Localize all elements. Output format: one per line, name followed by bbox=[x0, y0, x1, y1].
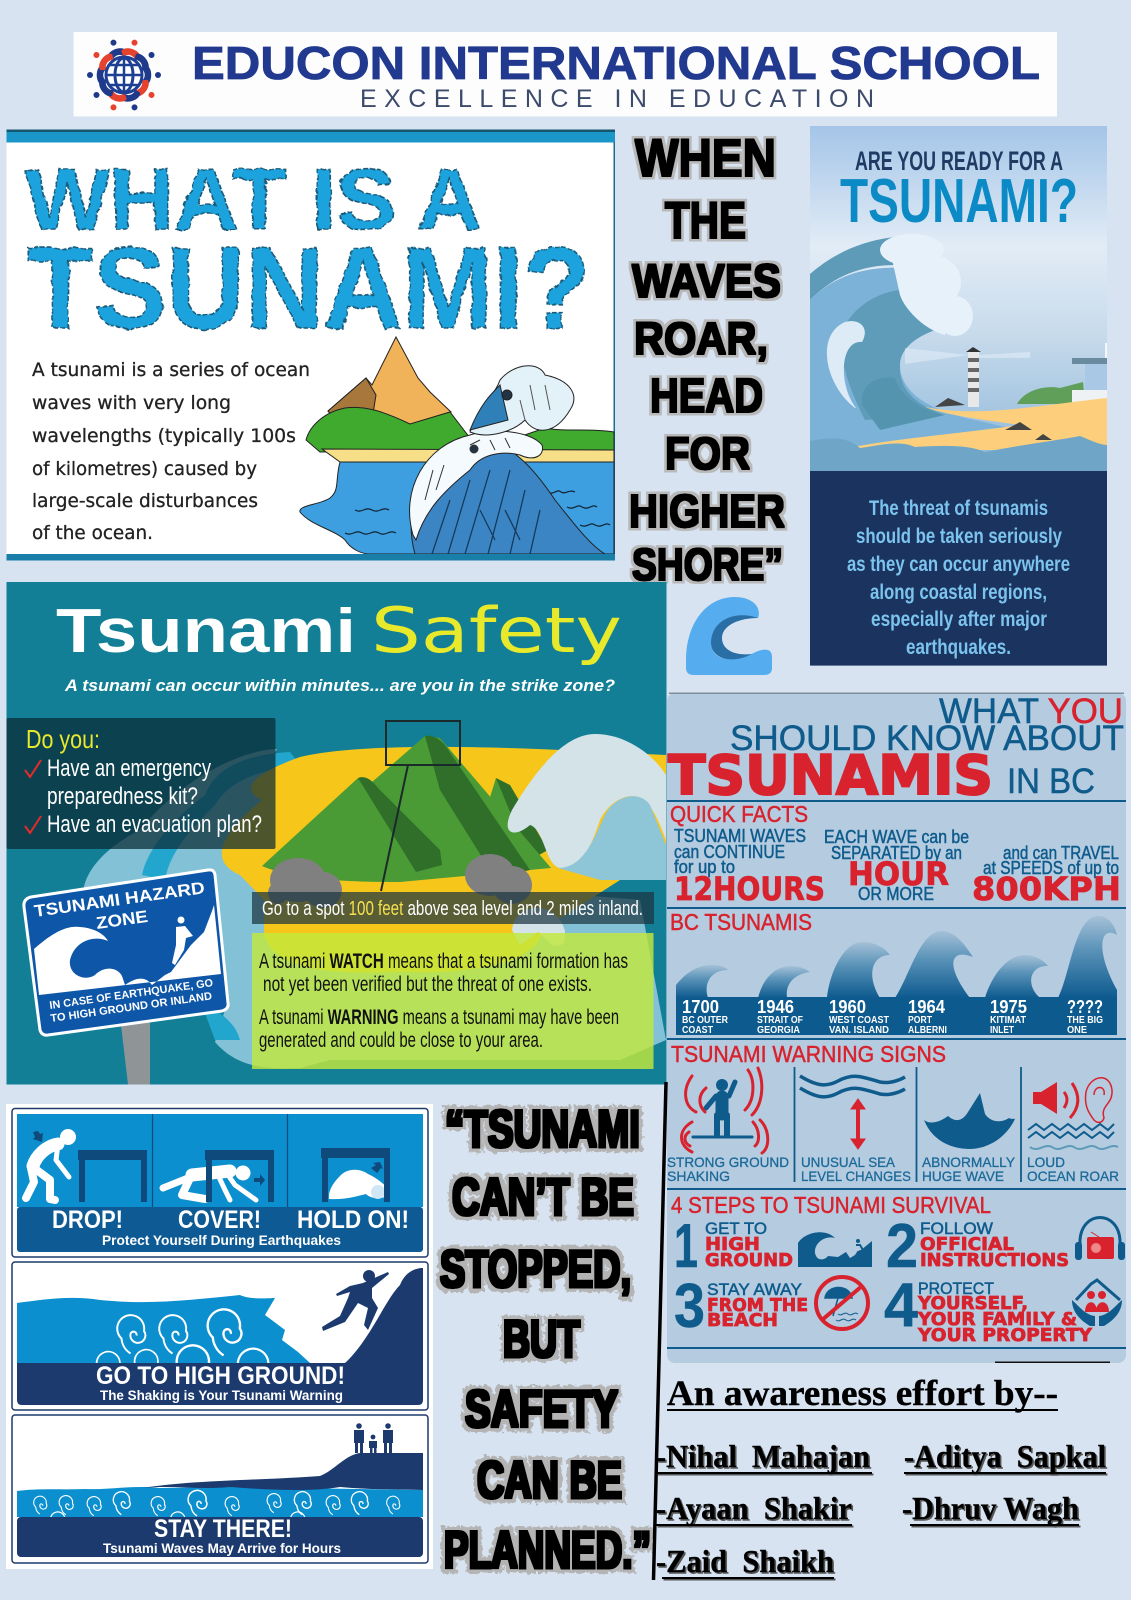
section: quick facts: SEPARATED by an bbox=[831, 843, 962, 863]
heading: what is a tsunami: TSUNAMI? bbox=[27, 223, 590, 353]
icon: huge wave bbox=[924, 1093, 1015, 1149]
callout: do you: preparedness kit? bbox=[47, 783, 198, 810]
section: bc tsunamis chart: 1964 bbox=[908, 997, 945, 1017]
heading: what is a tsunami bbox=[25, 152, 590, 353]
credit: student names: -Dhruv Wagh bbox=[902, 1490, 1079, 1526]
heading: tsunami cannot be stopped quote bbox=[440, 1100, 651, 1580]
heading: tsunami cannot be stopped quote: SAFETY bbox=[465, 1380, 618, 1439]
section: bc tsunamis chart: BC TSUNAMIS bbox=[670, 909, 812, 935]
callout: do you: Do you: bbox=[26, 724, 100, 754]
step 2 bbox=[886, 1212, 1125, 1281]
card: drop cover hold on: DROP! bbox=[52, 1206, 123, 1234]
section: bc tsunamis chart: THE BIG bbox=[1067, 1015, 1103, 1026]
step 3: 3 bbox=[674, 1272, 705, 1341]
panel: tsunami safety bbox=[6, 582, 666, 1084]
panel: what you should know about tsunamis in BC bbox=[667, 692, 1126, 1363]
callout: do you: Have an emergency bbox=[47, 755, 211, 782]
heading: what is a tsunami: WHAT IS A bbox=[25, 152, 482, 248]
credit: student names: -Nihal Mahajan bbox=[656, 1438, 870, 1474]
section: bc tsunamis chart: 1975 bbox=[990, 997, 1027, 1017]
step 4: PROTECT bbox=[918, 1279, 994, 1298]
sign: tsunami hazard zone: TO HIGH GROUND OR INLAND bbox=[50, 990, 213, 1025]
section: tsunami warning signs: LEVEL CHANGES bbox=[801, 1168, 911, 1184]
card: go to high ground: GO TO HIGH GROUND! bbox=[96, 1362, 345, 1390]
heading: when the waves roar slogan: ROAR, bbox=[634, 313, 768, 364]
section: quick facts: for up to bbox=[674, 857, 735, 877]
banner: go to a spot: Go to a spot 100 feet above sea level and 2 miles inland. bbox=[262, 898, 643, 920]
heading: when the waves roar slogan: WHEN bbox=[635, 129, 776, 188]
title: safety: Safety bbox=[371, 594, 622, 667]
text: definition: wavelengths (typically 100s bbox=[32, 425, 296, 447]
callout: watch and warning bbox=[252, 933, 654, 1069]
section: quick facts: HOUR bbox=[848, 855, 949, 893]
credits: awareness effort bbox=[656, 1373, 1106, 1579]
step 3: BEACH bbox=[707, 1310, 778, 1331]
icon: loud ocean roar bbox=[1028, 1078, 1118, 1149]
icon: running figure bbox=[322, 1270, 389, 1331]
callout: watch and warning: generated and could be close to your area. bbox=[259, 1029, 543, 1052]
card: stay there: Tsunami Waves May Arrive for Hours bbox=[103, 1540, 341, 1556]
section: quick facts: TSUNAMI WAVES bbox=[674, 826, 806, 846]
illustration: island and giant wave bbox=[300, 337, 614, 554]
text: threat of tsunamis: especially after major bbox=[871, 608, 1047, 631]
card: stay there bbox=[12, 1415, 428, 1563]
heading: tsunami cannot be stopped quote: PLANNED.” bbox=[444, 1521, 651, 1580]
text: threat of tsunamis: along coastal regions, bbox=[870, 581, 1047, 604]
icon: ground shaking bbox=[682, 1068, 768, 1153]
step 1: GROUND bbox=[705, 1250, 793, 1271]
card: go to high ground: The Shaking is Your Tsunami Warning bbox=[100, 1387, 343, 1403]
callout: watch and warning: A tsunami WATCH means that a tsunami formation has bbox=[259, 950, 628, 973]
section: bc tsunamis chart: GEORGIA bbox=[757, 1025, 800, 1036]
heading: tsunami cannot be stopped quote: STOPPED, bbox=[440, 1240, 631, 1299]
section: bc tsunamis chart: ALBERNI bbox=[908, 1025, 947, 1036]
step 4 bbox=[884, 1271, 1122, 1346]
section: bc tsunamis chart: VAN. ISLAND bbox=[829, 1025, 889, 1036]
text: definition bbox=[32, 359, 310, 544]
section: bc tsunamis chart: 1700 bbox=[682, 997, 719, 1017]
section: bc tsunamis chart: ONE bbox=[1067, 1025, 1087, 1036]
section: tsunami warning signs: UNUSUAL SEA bbox=[801, 1154, 896, 1170]
icon: drop figure bbox=[26, 1129, 147, 1202]
step 3 bbox=[674, 1272, 868, 1341]
callout: do you bbox=[6, 718, 276, 849]
section: quick facts: can CONTINUE bbox=[674, 842, 785, 862]
section: tsunami warning signs bbox=[667, 1041, 1119, 1184]
sign: tsunami hazard zone bbox=[24, 870, 228, 1084]
heading: when the waves roar slogan: SHORE” bbox=[632, 539, 783, 590]
heading: what you should know: SHOULD KNOW ABOUT bbox=[730, 719, 1124, 758]
title: tsunami: Tsunami bbox=[56, 597, 356, 666]
text: definition: of kilometres) caused by bbox=[32, 458, 257, 480]
section: tsunami warning signs: TSUNAMI WARNING SIGNS bbox=[671, 1041, 946, 1067]
section: tsunami warning signs: STRONG GROUND bbox=[667, 1154, 789, 1170]
heading: when the waves roar slogan: HIGHER bbox=[629, 485, 785, 537]
text: definition: large-scale disturbances bbox=[32, 490, 258, 512]
section: quick facts: 12HOURS bbox=[674, 870, 825, 908]
text: definition: of the ocean. bbox=[32, 522, 153, 544]
icon: hold on figure bbox=[321, 1148, 390, 1202]
diagram: height marker bbox=[381, 721, 460, 891]
step 4: YOUR PROPERTY bbox=[917, 1325, 1093, 1346]
heading: tsunami cannot be stopped quote: BUT bbox=[503, 1310, 580, 1369]
step 4: YOURSELF, bbox=[917, 1293, 1028, 1314]
heading: what you should know: TSUNAMIS bbox=[668, 744, 993, 807]
callout: watch and warning: not yet been verified but the threat of one exists. bbox=[263, 973, 592, 996]
icon: family on high ground bbox=[354, 1423, 393, 1453]
text: definition: waves with very long bbox=[32, 392, 231, 414]
step 2: FOLLOW bbox=[920, 1219, 993, 1238]
header: school banner bbox=[74, 32, 1057, 116]
banner: go to a spot bbox=[252, 892, 654, 924]
section: quick facts bbox=[670, 801, 1121, 908]
heading: when the waves roar slogan: HEAD bbox=[650, 370, 763, 423]
text: threat of tsunamis bbox=[847, 497, 1070, 659]
divider line bbox=[654, 1082, 666, 1580]
icon: school logo bbox=[87, 37, 161, 113]
icon: sea level change bbox=[800, 1076, 905, 1149]
heading: when the waves roar slogan: WAVES bbox=[632, 254, 781, 307]
sign: tsunami hazard zone: ZONE bbox=[95, 907, 149, 933]
step 1 bbox=[674, 1212, 872, 1281]
panel: are you ready for a tsunami bbox=[810, 126, 1109, 666]
heading: tsunami cannot be stopped quote: CAN’T BE bbox=[452, 1168, 634, 1227]
section: bc tsunamis chart: WEST COAST bbox=[829, 1015, 889, 1026]
card: go to high ground bbox=[12, 1262, 428, 1410]
card: drop cover hold on: Protect Yourself During Earthquakes bbox=[102, 1232, 341, 1248]
subtitle: A tsunami can occur within minutes... are you in the strike zone? bbox=[64, 676, 616, 695]
step 3: FROM THE bbox=[707, 1295, 808, 1316]
section: bc tsunamis chart: ???? bbox=[1067, 997, 1103, 1017]
card: drop cover hold on bbox=[12, 1108, 428, 1257]
section: tsunami warning signs: SHAKING bbox=[667, 1168, 730, 1184]
credit: student names bbox=[656, 1438, 1106, 1579]
step 1: HIGH bbox=[705, 1234, 760, 1255]
section: quick facts: QUICK FACTS bbox=[670, 801, 808, 827]
heading: what you should know: WHAT YOU bbox=[939, 692, 1123, 731]
text: threat of tsunamis: The threat of tsunamis bbox=[869, 497, 1048, 520]
callout: watch and warning: A tsunami WARNING means a tsunami may have been bbox=[259, 1006, 619, 1029]
text: threat of tsunamis: should be taken seriously bbox=[856, 525, 1062, 548]
text: definition: A tsunami is a series of ocean bbox=[32, 359, 310, 381]
step 1: 1 bbox=[674, 1212, 698, 1281]
heading: tsunami cannot be stopped quote: “TSUNAMI bbox=[445, 1100, 640, 1159]
step 2: INSTRUCTIONS bbox=[920, 1250, 1069, 1271]
section: bc tsunamis chart: BC OUTER bbox=[682, 1015, 729, 1026]
step 3: STAY AWAY bbox=[707, 1280, 802, 1299]
credit: student names: -Ayaan Shakir bbox=[656, 1490, 852, 1526]
heading: when the waves roar slogan: FOR bbox=[665, 428, 750, 479]
section: bc tsunamis chart: INLET bbox=[990, 1025, 1014, 1036]
step 2: OFFICIAL bbox=[920, 1234, 1014, 1255]
school name: EDUCON INTERNATIONAL SCHOOL bbox=[192, 37, 1040, 89]
card: drop cover hold on: HOLD ON! bbox=[297, 1206, 409, 1234]
school motto: EXCELLENCE IN EDUCATION bbox=[360, 85, 874, 113]
heading: what you should know bbox=[668, 692, 1124, 807]
step 1: GET TO bbox=[705, 1219, 767, 1238]
section: quick facts: EACH WAVE can be bbox=[824, 827, 969, 847]
sign: tsunami hazard zone: TSUNAMI HAZARD bbox=[33, 878, 206, 921]
heading: tsunami cannot be stopped quote: CAN BE bbox=[477, 1451, 622, 1510]
credits: awareness effort: An awareness effort by-- bbox=[667, 1373, 1058, 1413]
section: tsunami warning signs: LOUD bbox=[1027, 1154, 1065, 1170]
text: threat of tsunamis: as they can occur anywhere bbox=[847, 553, 1070, 576]
section: bc tsunamis chart: 1946 bbox=[757, 997, 794, 1017]
section: tsunami warning signs: HUGE WAVE bbox=[922, 1168, 1004, 1184]
section: tsunami warning signs: OCEAN ROAR bbox=[1027, 1168, 1119, 1184]
icon: ocean wave bbox=[686, 597, 772, 675]
card: drop cover hold on: COVER! bbox=[178, 1206, 261, 1234]
section: quick facts: OR MORE bbox=[858, 884, 934, 904]
panel: earthquake and tsunami steps bbox=[6, 1104, 433, 1569]
credit: student names: -Aditya Sapkal bbox=[904, 1438, 1106, 1474]
section: bc tsunamis chart: PORT bbox=[908, 1015, 932, 1026]
step 2: 2 bbox=[886, 1212, 918, 1281]
heading: what you should know: IN BC bbox=[1007, 762, 1095, 801]
illustration: wave with lighthouse bbox=[810, 234, 1109, 471]
credit: student names: -Zaid Shaikh bbox=[656, 1543, 834, 1579]
section: bc tsunamis chart: STRAIT OF bbox=[757, 1015, 803, 1026]
section: 4 steps to tsunami survival: 4 STEPS TO TSUNAMI SURVIVAL bbox=[671, 1192, 991, 1218]
section: bc tsunamis chart bbox=[670, 909, 1117, 1036]
icon: cover figure bbox=[163, 1150, 274, 1202]
section: bc tsunamis chart: KITIMAT bbox=[990, 1015, 1026, 1026]
sign: tsunami hazard zone: IN CASE OF EARTHQUAKE, GO bbox=[49, 977, 214, 1012]
heading: when the waves roar slogan bbox=[629, 129, 785, 590]
section: tsunami warning signs: ABNORMALLY bbox=[922, 1154, 1016, 1170]
step 4: YOUR FAMILY & bbox=[917, 1309, 1077, 1330]
text: threat of tsunamis: earthquakes. bbox=[906, 636, 1011, 659]
panel: what is a tsunami bbox=[6, 130, 615, 560]
step 4: 4 bbox=[884, 1271, 919, 1340]
section: quick facts: 800KPH bbox=[972, 870, 1121, 908]
heading: when the waves roar slogan: THE bbox=[665, 192, 746, 250]
section: bc tsunamis chart: 1960 bbox=[829, 997, 866, 1017]
section: bc tsunamis chart: COAST bbox=[682, 1025, 713, 1036]
callout: do you: Have an evacuation plan? bbox=[47, 811, 262, 838]
illustration: island map bbox=[83, 734, 666, 1068]
section: 4 steps to tsunami survival bbox=[671, 1192, 1125, 1346]
card: stay there: STAY THERE! bbox=[154, 1515, 292, 1543]
